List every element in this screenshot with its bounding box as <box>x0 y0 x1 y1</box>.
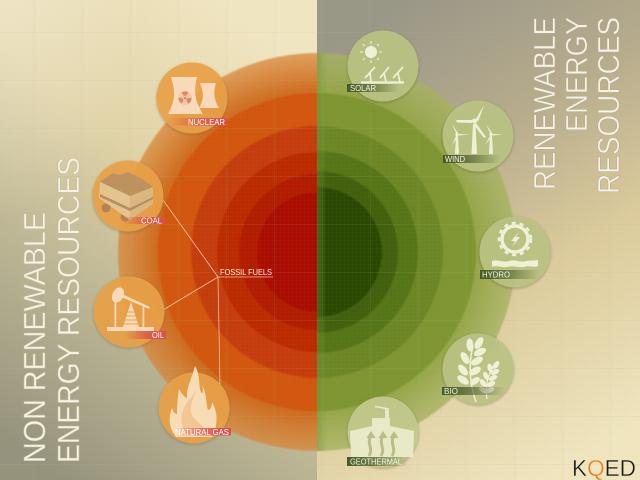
background: non renewable half <box>0 0 317 480</box>
icon: oil pump <box>107 285 154 331</box>
red concentric half circle <box>117 52 317 452</box>
node: hydro <box>479 216 551 289</box>
icon: wheat <box>456 336 501 402</box>
node: bio: BIO <box>444 386 458 396</box>
fossil fuels connector lines <box>163 200 273 385</box>
node: geothermal: GEOTHERMAL <box>350 456 402 466</box>
node: solar: SOLAR <box>350 83 376 93</box>
node: nuclear: NUCLEAR <box>188 117 225 127</box>
node: solar <box>347 30 419 103</box>
node: wind: WIND <box>445 154 465 164</box>
node: geothermal <box>347 396 419 469</box>
title: non renewable energy resources <box>17 157 86 463</box>
background: renewable half <box>317 0 640 480</box>
node: coal: COAL <box>141 215 162 225</box>
title: renewable energy resources: RESOURCES <box>591 17 626 194</box>
icon: coal cart <box>99 172 153 222</box>
title: non renewable energy resources: NON RENEWABLE <box>17 212 52 463</box>
node: natural gas <box>158 366 231 445</box>
title: non renewable energy resources: ENERGY RESOURCES <box>51 157 86 463</box>
node: hydro: HYDRO <box>482 270 510 280</box>
node: wind <box>442 100 514 173</box>
icon: wind turbines <box>452 105 503 154</box>
node: coal <box>92 160 165 233</box>
icon: water wheel <box>492 223 538 267</box>
icon: cooling towers <box>168 77 219 114</box>
title: renewable energy resources <box>527 17 626 194</box>
icon: geothermal plant <box>350 406 414 457</box>
node: oil <box>93 276 166 349</box>
icon: flame <box>170 366 216 437</box>
title: renewable energy resources: ENERGY <box>559 17 594 132</box>
node: natural gas: NATURAL GAS <box>175 427 229 437</box>
icon: sun and panels <box>360 41 404 82</box>
node: nuclear <box>156 62 228 135</box>
fossil fuels label: FOSSIL FUELS <box>220 267 272 277</box>
green concentric half circle <box>317 52 514 452</box>
node: oil: OIL <box>152 330 164 340</box>
node: bio <box>442 334 514 406</box>
title: renewable energy resources: RENEWABLE <box>527 17 562 190</box>
